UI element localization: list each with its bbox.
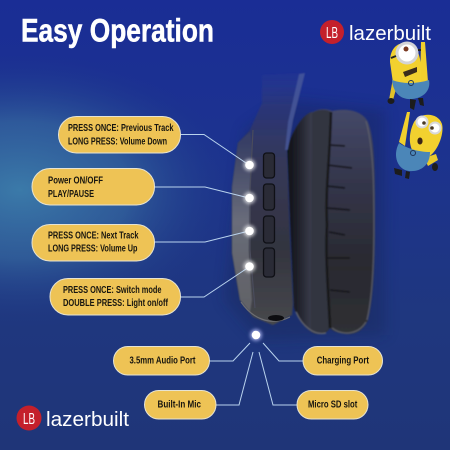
ear cushion [287,109,375,334]
callout: next track: LONG PRESS: Volume Up [48,244,138,254]
logo: bottom lazerbuilt: lazerbuilt [46,409,129,431]
minion: lower [394,112,442,179]
control buttons [264,153,274,277]
headphones [225,73,385,340]
logo: top lazerbuilt [320,20,431,45]
minion: upper [388,42,429,110]
audio jack [268,315,284,321]
callout: power: Power ON/OFF [48,176,103,186]
callout: built-in mic [144,390,216,419]
callout: previous track: LONG PRESS: Volume Down [68,136,167,147]
callout: next track: PRESS ONCE: Next Track [48,230,139,242]
callout: micro sd slot: Micro SD slot [308,400,358,411]
callout: audio port: 3.5mm Audio Port [130,356,196,367]
title: Easy Operation [21,12,214,48]
callout: previous track: PRESS ONCE: Previous Track [68,123,174,134]
headband and housing [232,73,305,325]
logo: bottom lazerbuilt: LB [23,411,35,428]
callout: switch mode [50,278,180,315]
callout: micro sd slot [297,390,368,419]
leader lines: ports [210,343,303,405]
headband highlight [285,73,305,150]
callout: built-in mic: Built-In Mic [158,400,201,411]
callout: switch mode: DOUBLE PRESS: Light on/off [63,298,168,309]
indicator dots [244,159,262,341]
leader lines: buttons [154,134,249,297]
callout: charging port [303,346,382,375]
callout: charging port: Charging Port [317,356,370,367]
logo: bottom lazerbuilt [16,406,129,431]
callout: switch mode: PRESS ONCE: Switch mode [63,285,162,296]
logo: top lazerbuilt: LB [326,25,338,42]
callout: next track [32,224,154,261]
logo: top lazerbuilt: lazerbuilt [349,23,431,45]
callout: previous track [58,116,180,153]
callout: power: PLAY/PAUSE [48,189,94,200]
speaker mesh [232,132,252,312]
callout: power [32,168,154,205]
callout: audio port [114,346,210,375]
